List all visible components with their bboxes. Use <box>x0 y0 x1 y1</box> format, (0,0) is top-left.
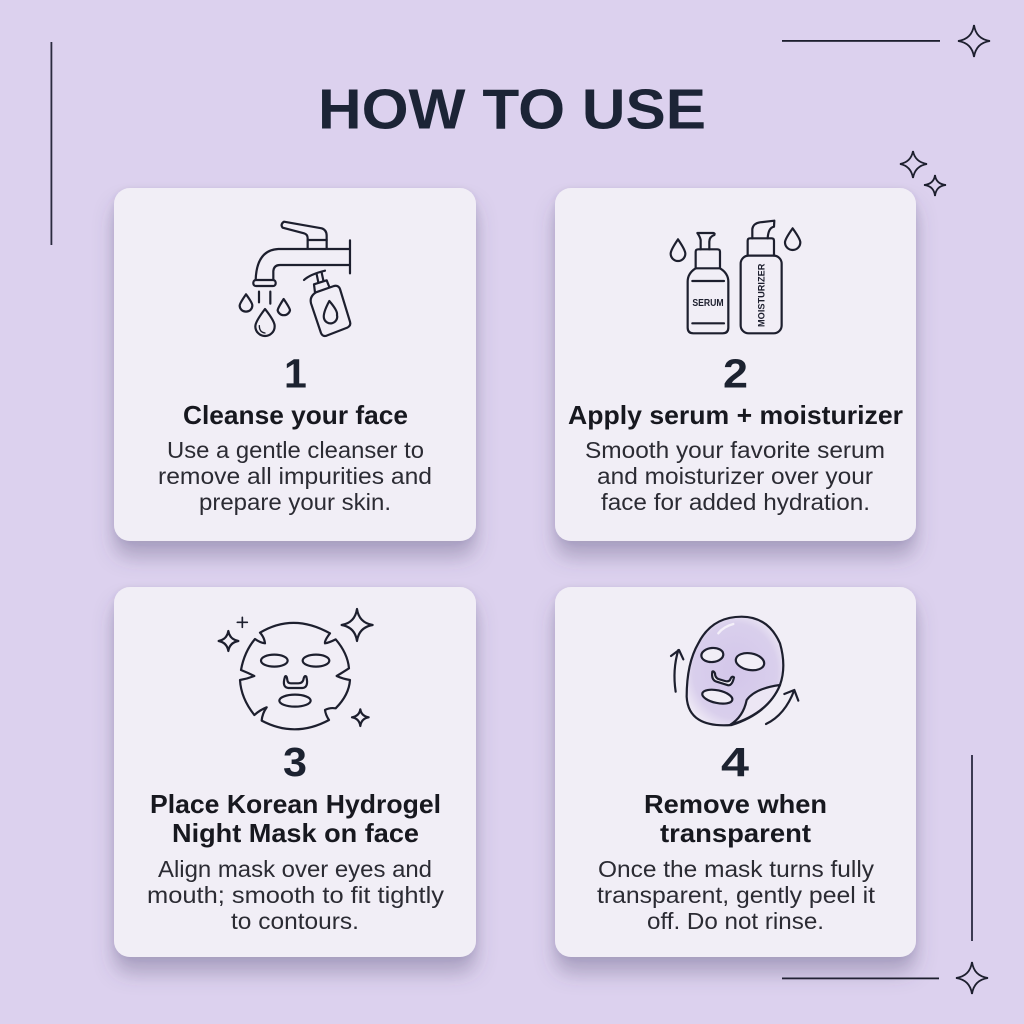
icon: small sparkle above card 2 <box>924 175 946 196</box>
step 4 heading <box>644 789 827 848</box>
step 1 description: Use a gentle cleanser to <box>167 437 424 463</box>
card 3 background <box>114 587 476 957</box>
icon: bottom right sparkle <box>956 962 988 994</box>
panel: step 3 <box>114 587 476 957</box>
icon: serum and moisturizer bottles <box>671 221 800 333</box>
card 2 background <box>555 188 916 541</box>
icon: serum and moisturizer bottles: SERUM <box>692 298 724 309</box>
decoration: top right line <box>782 40 940 42</box>
step 1 description: prepare your skin. <box>199 489 391 515</box>
step 3 description <box>147 856 445 934</box>
step 4 description: Once the mask turns fully <box>598 856 875 882</box>
step 4 description <box>597 856 876 934</box>
step 2 description: face for added hydration. <box>601 489 870 515</box>
card 1 background <box>114 188 476 541</box>
step 3 heading: Night Mask on face <box>172 818 419 848</box>
step 4 description: transparent, gently peel it <box>597 882 876 908</box>
step 3 description: Align mask over eyes and <box>158 856 432 882</box>
step 1 description <box>158 437 432 515</box>
step 4 description: off. Do not rinse. <box>647 908 824 934</box>
step 2 description: and moisturizer over your <box>597 463 873 489</box>
step 3 description: to contours. <box>231 908 359 934</box>
panel: step 2 <box>555 188 916 541</box>
card 4 background <box>555 587 916 957</box>
step 2 heading: Apply serum + moisturizer <box>568 400 903 430</box>
icon: sheet mask with sparkles <box>219 609 373 729</box>
step number 4: 4 <box>721 739 749 785</box>
step 1 heading: Cleanse your face <box>183 400 408 430</box>
step number 1: 1 <box>284 350 307 396</box>
decoration: bottom right line <box>782 978 939 979</box>
step 3 heading: Place Korean Hydrogel <box>150 789 441 819</box>
step 2 description <box>585 437 885 515</box>
step 4 heading: Remove when <box>644 789 827 819</box>
step number 3: 3 <box>283 739 307 785</box>
step 2 description: Smooth your favorite serum <box>585 437 885 463</box>
step 3 heading <box>150 789 441 848</box>
icon: large sparkle above card 2 <box>900 151 927 178</box>
panel: step 1 <box>114 188 476 541</box>
step 1 description: remove all impurities and <box>158 463 432 489</box>
panel: step 4 <box>555 587 916 957</box>
step number 2: 2 <box>723 350 748 396</box>
step 3 description: mouth; smooth to fit tightly <box>147 882 445 908</box>
icon: serum and moisturizer bottles: MOISTURIZER <box>757 263 767 327</box>
step 4 heading: transparent <box>660 818 811 848</box>
title: HOW TO USE <box>318 78 706 142</box>
decoration: bottom right vertical line <box>971 755 973 941</box>
icon: faucet and cleanser <box>240 222 350 336</box>
icon: top right sparkle <box>958 25 990 57</box>
icon: peeling transparent mask <box>671 617 798 725</box>
decoration: top left vertical line <box>50 42 52 245</box>
